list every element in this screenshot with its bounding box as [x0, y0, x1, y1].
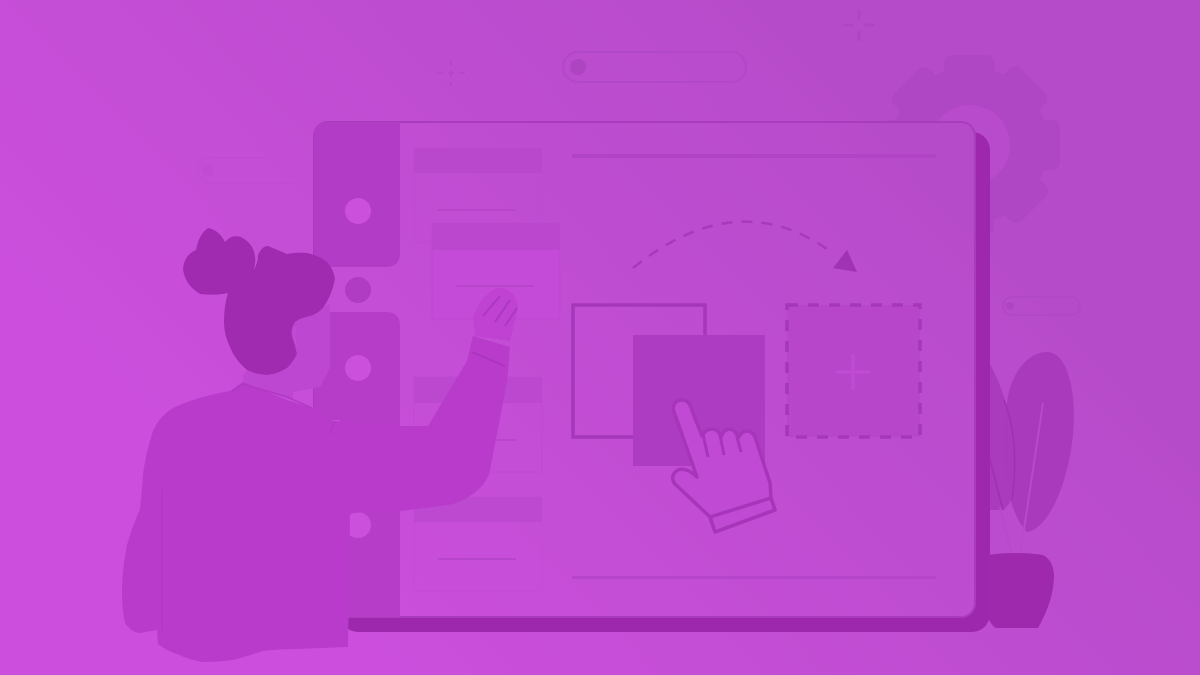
outline square	[573, 305, 705, 437]
dashed drop target	[787, 305, 920, 437]
card 2 dragged	[432, 223, 560, 319]
dashed arrow	[633, 222, 857, 272]
sidebar dot 1	[345, 198, 371, 224]
neck and face	[243, 304, 330, 400]
cuff line	[472, 352, 505, 366]
card 1	[414, 148, 542, 242]
icon: gear	[880, 55, 1060, 235]
search pill left	[198, 158, 323, 183]
filled square	[633, 335, 765, 466]
person	[122, 228, 518, 662]
icon: pointing hand	[673, 400, 775, 532]
card 3	[414, 377, 542, 472]
sidebar dot 3	[345, 355, 371, 381]
tablet screen	[314, 122, 975, 617]
tablet shadow body	[340, 132, 990, 632]
top rule	[572, 154, 936, 158]
search pill right	[1003, 297, 1080, 315]
shirt	[122, 336, 510, 662]
ear	[294, 327, 297, 345]
hand cuff	[703, 434, 775, 532]
left leaf	[985, 355, 1018, 510]
pot	[985, 553, 1054, 628]
sidebar dot 2	[345, 277, 371, 303]
bottom rule	[572, 576, 936, 579]
sparkle left	[437, 60, 465, 86]
hand	[473, 288, 518, 341]
sparkle right	[845, 11, 873, 40]
collar line	[162, 384, 335, 630]
card 4	[414, 497, 542, 591]
stems	[1000, 403, 1043, 556]
hair	[224, 246, 335, 375]
sidebar bottom block	[314, 312, 400, 617]
bun	[183, 228, 255, 295]
search pill top	[563, 52, 746, 82]
right leaf	[1004, 352, 1074, 532]
plant	[985, 352, 1074, 628]
sidebar top block	[314, 122, 400, 267]
sidebar dot 4	[345, 512, 371, 538]
